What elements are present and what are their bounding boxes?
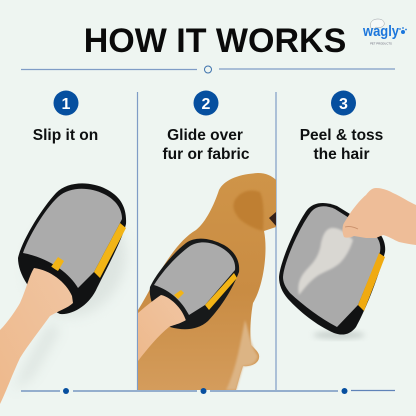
top divider	[21, 66, 395, 73]
dog ear	[233, 190, 264, 231]
photo 1: hand in mitt	[0, 183, 145, 404]
photo 3: peeling hair from mitt	[279, 188, 416, 339]
mitt cuff	[180, 309, 186, 320]
hand	[138, 295, 186, 361]
mitt cuff	[19, 257, 78, 304]
mitt	[279, 203, 385, 335]
column dividers	[138, 92, 276, 390]
mitt	[18, 183, 126, 314]
logo: wagly: wagly	[362, 24, 399, 40]
dog muzzle	[269, 212, 276, 226]
mitt strap	[94, 223, 126, 278]
icon: dog head sketch	[370, 19, 384, 29]
number badge 2: 2	[202, 96, 211, 113]
logo: wagly: PET PRODUCTS	[370, 42, 392, 46]
number badge 1: 1	[62, 96, 71, 113]
hair tuft	[298, 228, 353, 295]
mitt tag	[51, 257, 64, 271]
bottom timeline	[21, 388, 395, 394]
mitt	[150, 239, 239, 329]
icon: paw	[399, 27, 407, 34]
photo 2: mitt on dog	[138, 173, 276, 390]
hand	[0, 268, 73, 404]
label: Peel & toss the hair: Peel & toss	[300, 127, 383, 144]
mitt tag	[174, 290, 184, 299]
label: Glide over fur or fabric: Glide over	[167, 127, 243, 144]
step 1 heading	[33, 90, 98, 144]
step 2 heading	[163, 90, 250, 163]
label: Slip it on: Slip it on	[33, 127, 98, 144]
hand	[342, 188, 416, 245]
mitt strap	[205, 273, 237, 310]
logo: wagly	[362, 19, 407, 46]
label: Peel & toss the hair: the hair	[314, 146, 369, 163]
dog	[138, 173, 276, 390]
label: Glide over fur or fabric: fur or fabric	[163, 146, 250, 163]
title: HOW IT WORKS	[84, 22, 346, 60]
number badge 3: 3	[339, 96, 348, 113]
step 3 heading	[300, 90, 383, 163]
mitt strap	[358, 253, 385, 311]
